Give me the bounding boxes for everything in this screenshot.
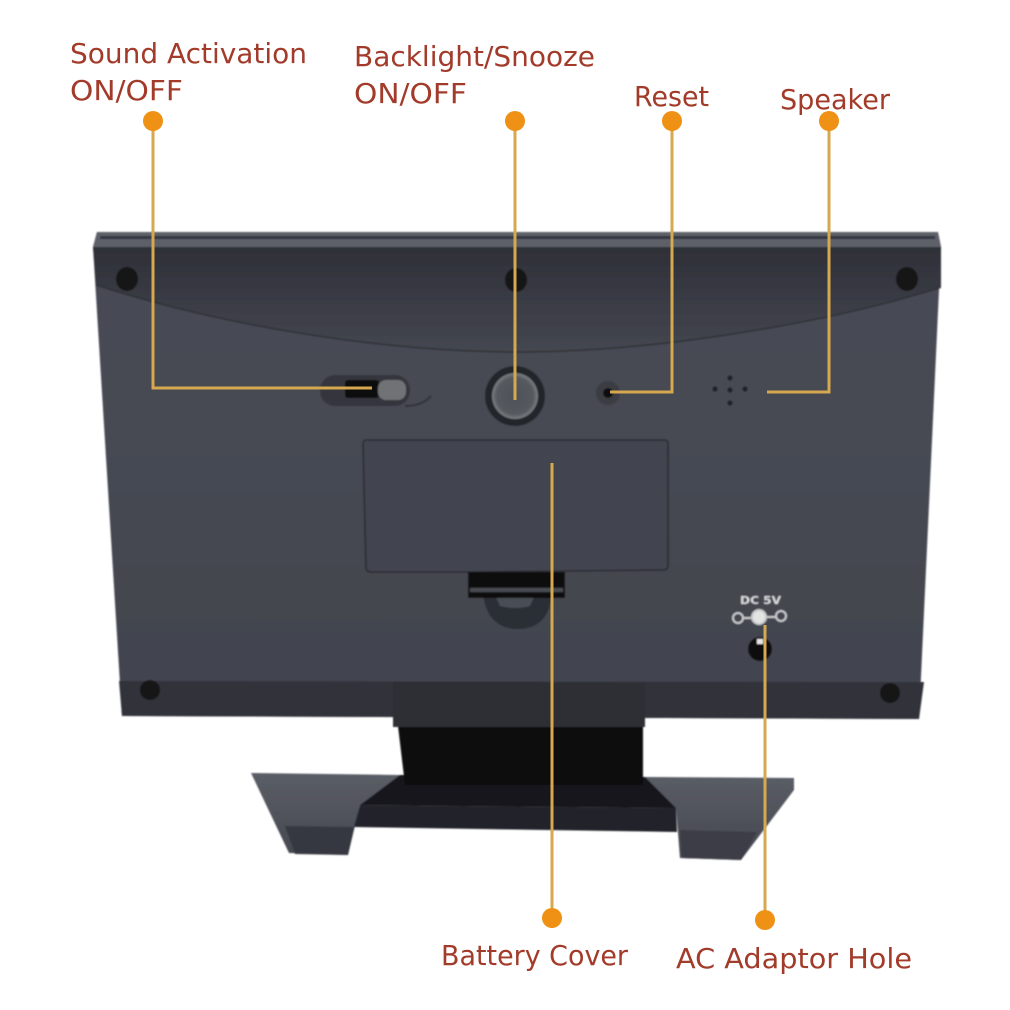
callout: backlight snooze: ON/OFF xyxy=(354,77,467,110)
callout: sound activation xyxy=(70,37,372,388)
label: Reset xyxy=(634,80,709,113)
DC 5V polarity mark xyxy=(733,594,786,624)
callout: battery cover xyxy=(441,463,628,972)
AC adaptor jack xyxy=(748,637,772,661)
stand hinge notch xyxy=(468,572,565,629)
DC 5V polarity mark: DC 5V xyxy=(740,594,782,607)
label: AC Adaptor Hole xyxy=(676,942,912,975)
leader line xyxy=(550,463,554,918)
leader line xyxy=(767,121,829,392)
callout: backlight snooze xyxy=(354,40,595,400)
label: Sound Activation xyxy=(70,37,307,70)
reset hole xyxy=(596,381,620,405)
top bevel xyxy=(93,232,941,247)
callout: reset xyxy=(610,80,709,392)
device: clock rear xyxy=(93,232,941,860)
leader line xyxy=(514,121,516,400)
label: Battery Cover xyxy=(441,939,628,972)
speaker holes xyxy=(712,375,748,406)
display panel back xyxy=(93,232,941,719)
upper curved recess xyxy=(93,247,941,352)
leader line xyxy=(153,121,372,388)
callout: speaker xyxy=(767,83,890,392)
sound activation slide switch xyxy=(320,375,431,406)
label: Backlight/Snooze xyxy=(354,40,595,73)
callout: sound activation: ON/OFF xyxy=(70,74,183,107)
backlight snooze button xyxy=(485,366,545,426)
screws xyxy=(116,267,918,703)
battery cover xyxy=(363,440,668,572)
lower band xyxy=(119,681,924,719)
leader line xyxy=(610,121,672,392)
label: Speaker xyxy=(780,83,890,116)
leader line xyxy=(764,625,766,920)
callout: AC adaptor hole xyxy=(676,625,912,975)
stand neck xyxy=(393,682,645,785)
stand base xyxy=(251,773,794,860)
